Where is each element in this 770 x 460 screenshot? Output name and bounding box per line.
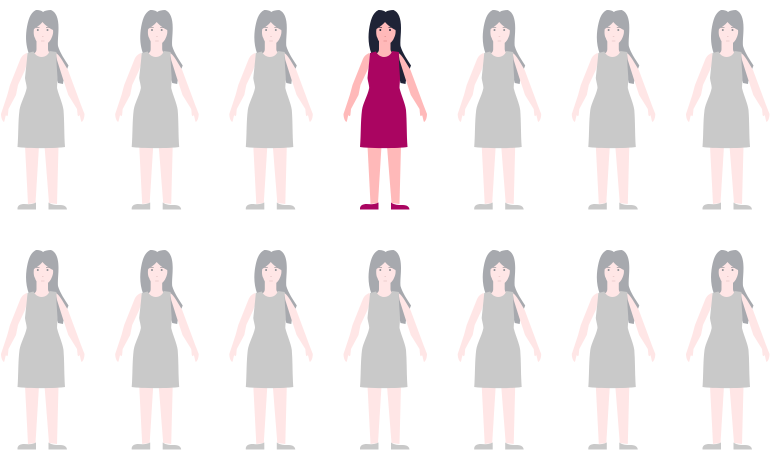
figure 3 <box>229 10 313 210</box>
figure 8 <box>1 250 84 450</box>
figure 10 <box>229 250 313 450</box>
figure 7 <box>686 10 770 210</box>
figure 4: highlighted woman <box>344 10 427 210</box>
row 1 <box>1 10 770 210</box>
figure 6 <box>572 10 655 210</box>
figure 11 <box>344 250 427 450</box>
figure 13 <box>572 250 655 450</box>
row 2 <box>1 250 770 450</box>
figure 12 <box>458 250 541 450</box>
figure 9 <box>115 250 199 450</box>
figure 1 <box>1 10 84 210</box>
figure 14 <box>686 250 770 450</box>
figure 5 <box>458 10 541 210</box>
figure 2 <box>115 10 199 210</box>
